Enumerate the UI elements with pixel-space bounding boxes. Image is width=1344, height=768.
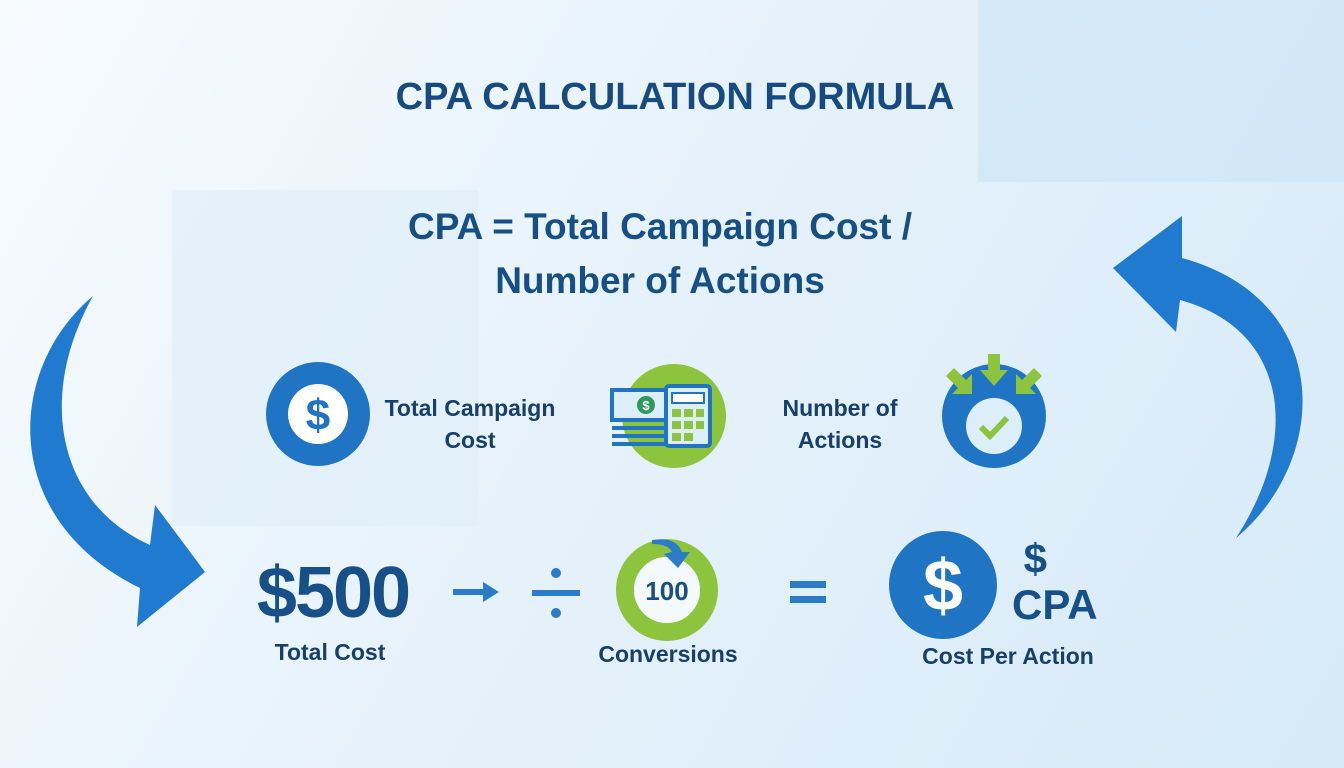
formula: Number of Actions: [495, 260, 825, 301]
label: number of actions: [782, 395, 898, 453]
label: conversions: Conversions: [598, 641, 738, 667]
label: cost per action: Cost Per Action: [922, 643, 1094, 669]
icon: target check: [942, 354, 1046, 468]
icon: money calculator: [610, 364, 726, 468]
arrow: right small: [453, 582, 499, 602]
label: number of actions: Actions: [798, 427, 882, 453]
icon: dollar circle: [266, 362, 370, 466]
divide sign: [532, 568, 580, 618]
equals sign: [790, 581, 826, 603]
value: $500: $500: [257, 553, 409, 633]
formula: CPA = Total Campaign Cost /: [408, 206, 912, 247]
label: total cost: Total Cost: [275, 639, 385, 665]
panel: left translucent block: [172, 190, 478, 526]
result: $ CPA: [1012, 535, 1098, 628]
label: total campaign cost: Cost: [444, 427, 496, 453]
label: total campaign cost: Total Campaign: [385, 395, 555, 421]
result: $ CPA: $: [1024, 535, 1047, 582]
title: CPA CALCULATION FORMULA: [396, 76, 954, 118]
icon: dollar circle: $: [306, 391, 330, 440]
panel: top right block: [978, 0, 1344, 182]
formula: [408, 206, 912, 301]
icon: money calculator: $: [642, 398, 650, 413]
result: $ CPA: CPA: [1012, 581, 1098, 628]
label: number of actions: Number of: [782, 395, 898, 421]
icon: dollar result: [889, 531, 997, 639]
label: total campaign cost: [384, 395, 555, 453]
icon: 100 conversions ring: [616, 539, 718, 641]
icon: 100 conversions ring: 100: [645, 576, 689, 606]
icon: dollar result: $: [923, 546, 963, 626]
